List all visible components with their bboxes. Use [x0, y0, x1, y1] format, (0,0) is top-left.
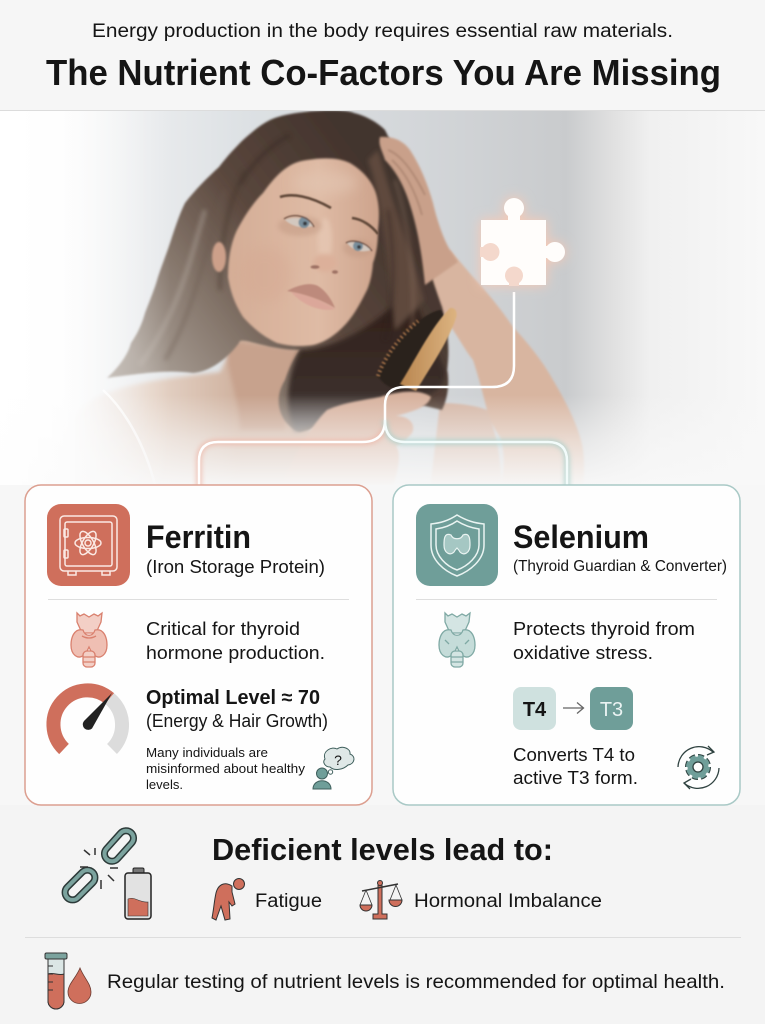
- T4 to T3 conversion: T3: [600, 699, 623, 721]
- note: misinformed about healthy: [146, 761, 306, 776]
- icon: person with question cloud: [313, 747, 354, 789]
- T4 to T3 conversion: T4: [523, 699, 547, 721]
- heading: deficient: Deficient levels lead to:: [212, 832, 553, 867]
- note: [146, 745, 306, 792]
- face: [212, 158, 379, 346]
- text: oxidative stress: Protects thyroid from: [513, 618, 695, 639]
- label: hormonal imbalance: Hormonal Imbalance: [414, 891, 602, 912]
- icon: thyroid: [71, 613, 107, 667]
- text: thyroid production: Critical for thyroid: [146, 618, 300, 639]
- hairbrush: [378, 308, 457, 391]
- icon: balance scale: [360, 880, 402, 919]
- icon: person with question cloud: ?: [334, 752, 342, 768]
- panel: ferritin: (Energy & Hair Growth): [146, 711, 328, 731]
- icon: low battery: [125, 868, 151, 919]
- subtitle: Energy production in the body requires essential raw materials.: [92, 21, 673, 42]
- subheading: (Thyroid Guardian & Converter): [513, 558, 727, 575]
- icon: glowing puzzle piece: [480, 198, 565, 286]
- heading: selenium: Selenium: [513, 519, 649, 555]
- hair: [107, 110, 448, 432]
- icon: fatigue figure: [212, 878, 244, 920]
- icon: shield with thyroid: [416, 504, 498, 586]
- icon: test tube: [45, 953, 67, 1009]
- text: oxidative stress: oxidative stress.: [513, 642, 653, 663]
- hair strands: [140, 135, 413, 365]
- subheading: (Iron Storage Protein): [146, 557, 325, 577]
- facial features: [280, 195, 378, 310]
- text: thyroid production: hormone production.: [146, 642, 325, 663]
- icon: safe with atom: [47, 504, 130, 586]
- text: conversion: active T3 form.: [513, 767, 638, 788]
- header: [0, 0, 765, 111]
- arm: [432, 250, 584, 472]
- gauge: [53, 690, 122, 749]
- shoulder strap: [106, 392, 150, 464]
- icon: broken chain: [62, 828, 137, 903]
- lower background: [0, 805, 765, 1024]
- text: oxidative stress: [513, 618, 695, 663]
- dark hair below chin: [288, 150, 445, 432]
- icon: gear with arrows: [678, 746, 719, 789]
- photo: woman brushing hair: [0, 111, 642, 485]
- panel: ferritin: [25, 485, 372, 805]
- hand on head: [379, 137, 458, 285]
- hand holding brush: [310, 390, 432, 474]
- T4 to T3 conversion: [513, 687, 633, 730]
- connector lines: [199, 292, 567, 490]
- text: conversion: [513, 744, 638, 788]
- optimal level: Optimal Level ≈ 70: [146, 687, 320, 709]
- title: The Nutrient Co-Factors You Are Missing: [46, 52, 721, 93]
- panel: selenium: [393, 485, 740, 805]
- note: levels.: [146, 777, 183, 792]
- text: conversion: Converts T4 to: [513, 744, 635, 765]
- icon: thyroid teal: [439, 613, 475, 667]
- label: fatigue: Fatigue: [255, 891, 322, 912]
- note: Many individuals are: [146, 745, 268, 760]
- icon: blood drop: [68, 968, 91, 1004]
- heading: ferritin: Ferritin: [146, 519, 251, 555]
- text: thyroid production: [146, 618, 325, 663]
- footer text: Regular testing of nutrient levels is recommended for optimal health.: [107, 971, 725, 993]
- torso and neck: [102, 340, 310, 476]
